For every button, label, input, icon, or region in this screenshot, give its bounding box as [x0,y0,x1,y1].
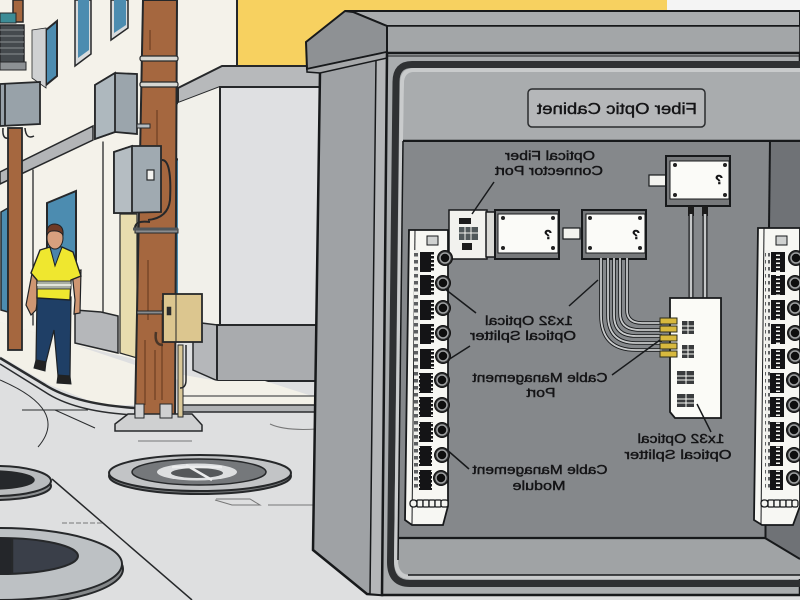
cabinet nameplate: Fiber Optic Cabinet [536,101,697,118]
label: cable management port [472,370,608,400]
module box 3 [649,156,730,216]
label: 1x32 optical splitter, left [469,313,576,343]
right connector strip [754,228,800,525]
vertical cables to splitter [691,214,705,298]
left connector strip [405,230,452,525]
module box 2 [563,210,646,259]
label: cable management module: Module [512,478,566,493]
label: optical fiber connector port: Optical Fiber [504,148,595,163]
dark channel [390,64,800,584]
window row [32,0,128,88]
leader lines [445,182,711,469]
back panel [398,142,770,538]
doors [1,156,191,358]
label: 1x32 optical splitter, right: 1x32 Optical [637,431,724,446]
right compartment [766,142,800,558]
fiber optic cabinet [306,11,800,595]
manhole: left small [0,466,51,500]
grey box on background pole [0,82,40,126]
bottom tray [398,538,800,575]
connector port block [449,210,495,259]
wall base [75,310,118,353]
cabinet side wall [313,56,387,595]
utility pole: foreground [115,0,202,431]
label: optical fiber connector port: Connector Port [495,163,603,178]
label: 1x32 optical splitter, left: Optical Splitter [469,328,576,343]
cabinet nameplate [528,89,705,127]
arms [26,268,42,315]
module box 1: ? [544,227,552,242]
yellow fiber connectors [660,318,677,357]
module box 3: ? [715,172,723,187]
building band [0,126,93,184]
tan junction box [156,294,202,345]
utility pole: background with transformer [0,0,34,350]
grey box: meter [114,146,178,229]
module box 1 [495,210,559,259]
label: 1x32 optical splitter, left: 1x32 Optical [485,313,573,328]
label: optical fiber connector port [495,148,603,178]
head [47,227,63,249]
cabinet lid [345,11,800,26]
splitter box [670,298,721,418]
manhole: centre [109,441,313,505]
cabinet header panel [403,72,800,141]
legs [36,297,71,376]
label: cable management module: Cable Management [472,462,608,477]
module box 2: ? [632,227,640,242]
label: 1x32 optical splitter, right [624,431,732,462]
sidewalk [0,322,318,447]
building: right grey block [178,66,322,381]
label: 1x32 optical splitter, right: Optical Splitter [624,447,732,462]
person in high-vis vest [26,224,81,384]
manhole: left large [0,523,123,600]
fan-out cable bundle [601,258,662,350]
label: cable management module [472,462,608,493]
label: cable management port: Cable Management [472,370,608,385]
grey box: upper [95,73,150,139]
shirt sleeves and vest [31,247,81,300]
road marking [52,479,192,600]
building: left white facade [0,0,237,380]
cabinet front frame [382,53,800,595]
label: cable management port: Port [526,385,556,400]
